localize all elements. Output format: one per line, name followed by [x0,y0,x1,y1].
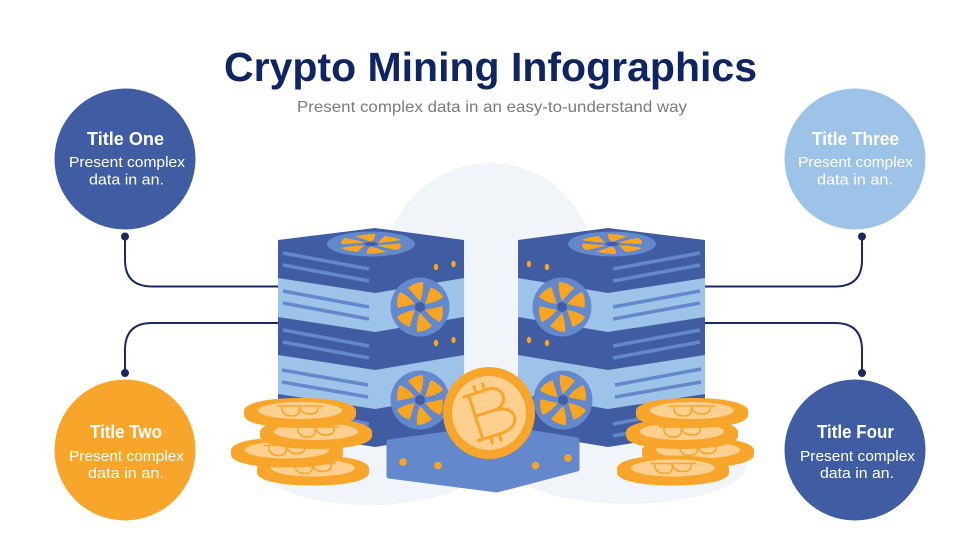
callout: title three: Present complex [798,154,914,171]
callout: title two [54,380,196,520]
callout: title four [784,380,926,520]
icon: lower fan [390,370,450,430]
callout: title four: Present complex [800,448,916,465]
icon: lower fan [534,370,592,430]
callout: title one: Title One [87,129,164,149]
callout: title one: Present complex [69,154,186,171]
title: Crypto Mining Infographics [224,44,757,90]
left server stack [278,228,464,447]
connector: title one [121,232,279,286]
callout: title four: Title Four [817,422,894,442]
callout: title three [784,88,926,230]
callout: title one [54,88,196,230]
icon: upper fan [532,278,592,336]
connector: title two [121,323,279,377]
icon: central bitcoin coin [443,367,535,459]
subtitle: Present complex data in an easy-to-understand way [297,99,687,116]
icon: upper fan [390,278,450,336]
icon: top fan [576,234,648,254]
callout: title three: Title Three [812,129,899,149]
callout: title two: Title Two [90,422,162,442]
icon: status lights [434,261,456,346]
background: pale circle and ground shapes [258,163,747,505]
right coin stack [617,398,754,486]
right server stack [518,228,705,447]
callout: title two: data in an. [88,465,164,482]
callout: title three: data in an. [817,172,893,188]
callout: title four: data in an. [820,465,894,482]
base unit [389,427,577,490]
callout: title two: Present complex [69,448,185,465]
left coin stack [231,398,372,486]
icon: status lights [527,261,549,346]
connector: title three [704,232,866,286]
connector: title four [704,323,866,377]
callout: title one: data in an. [89,172,164,188]
icon: top fan [335,234,407,254]
